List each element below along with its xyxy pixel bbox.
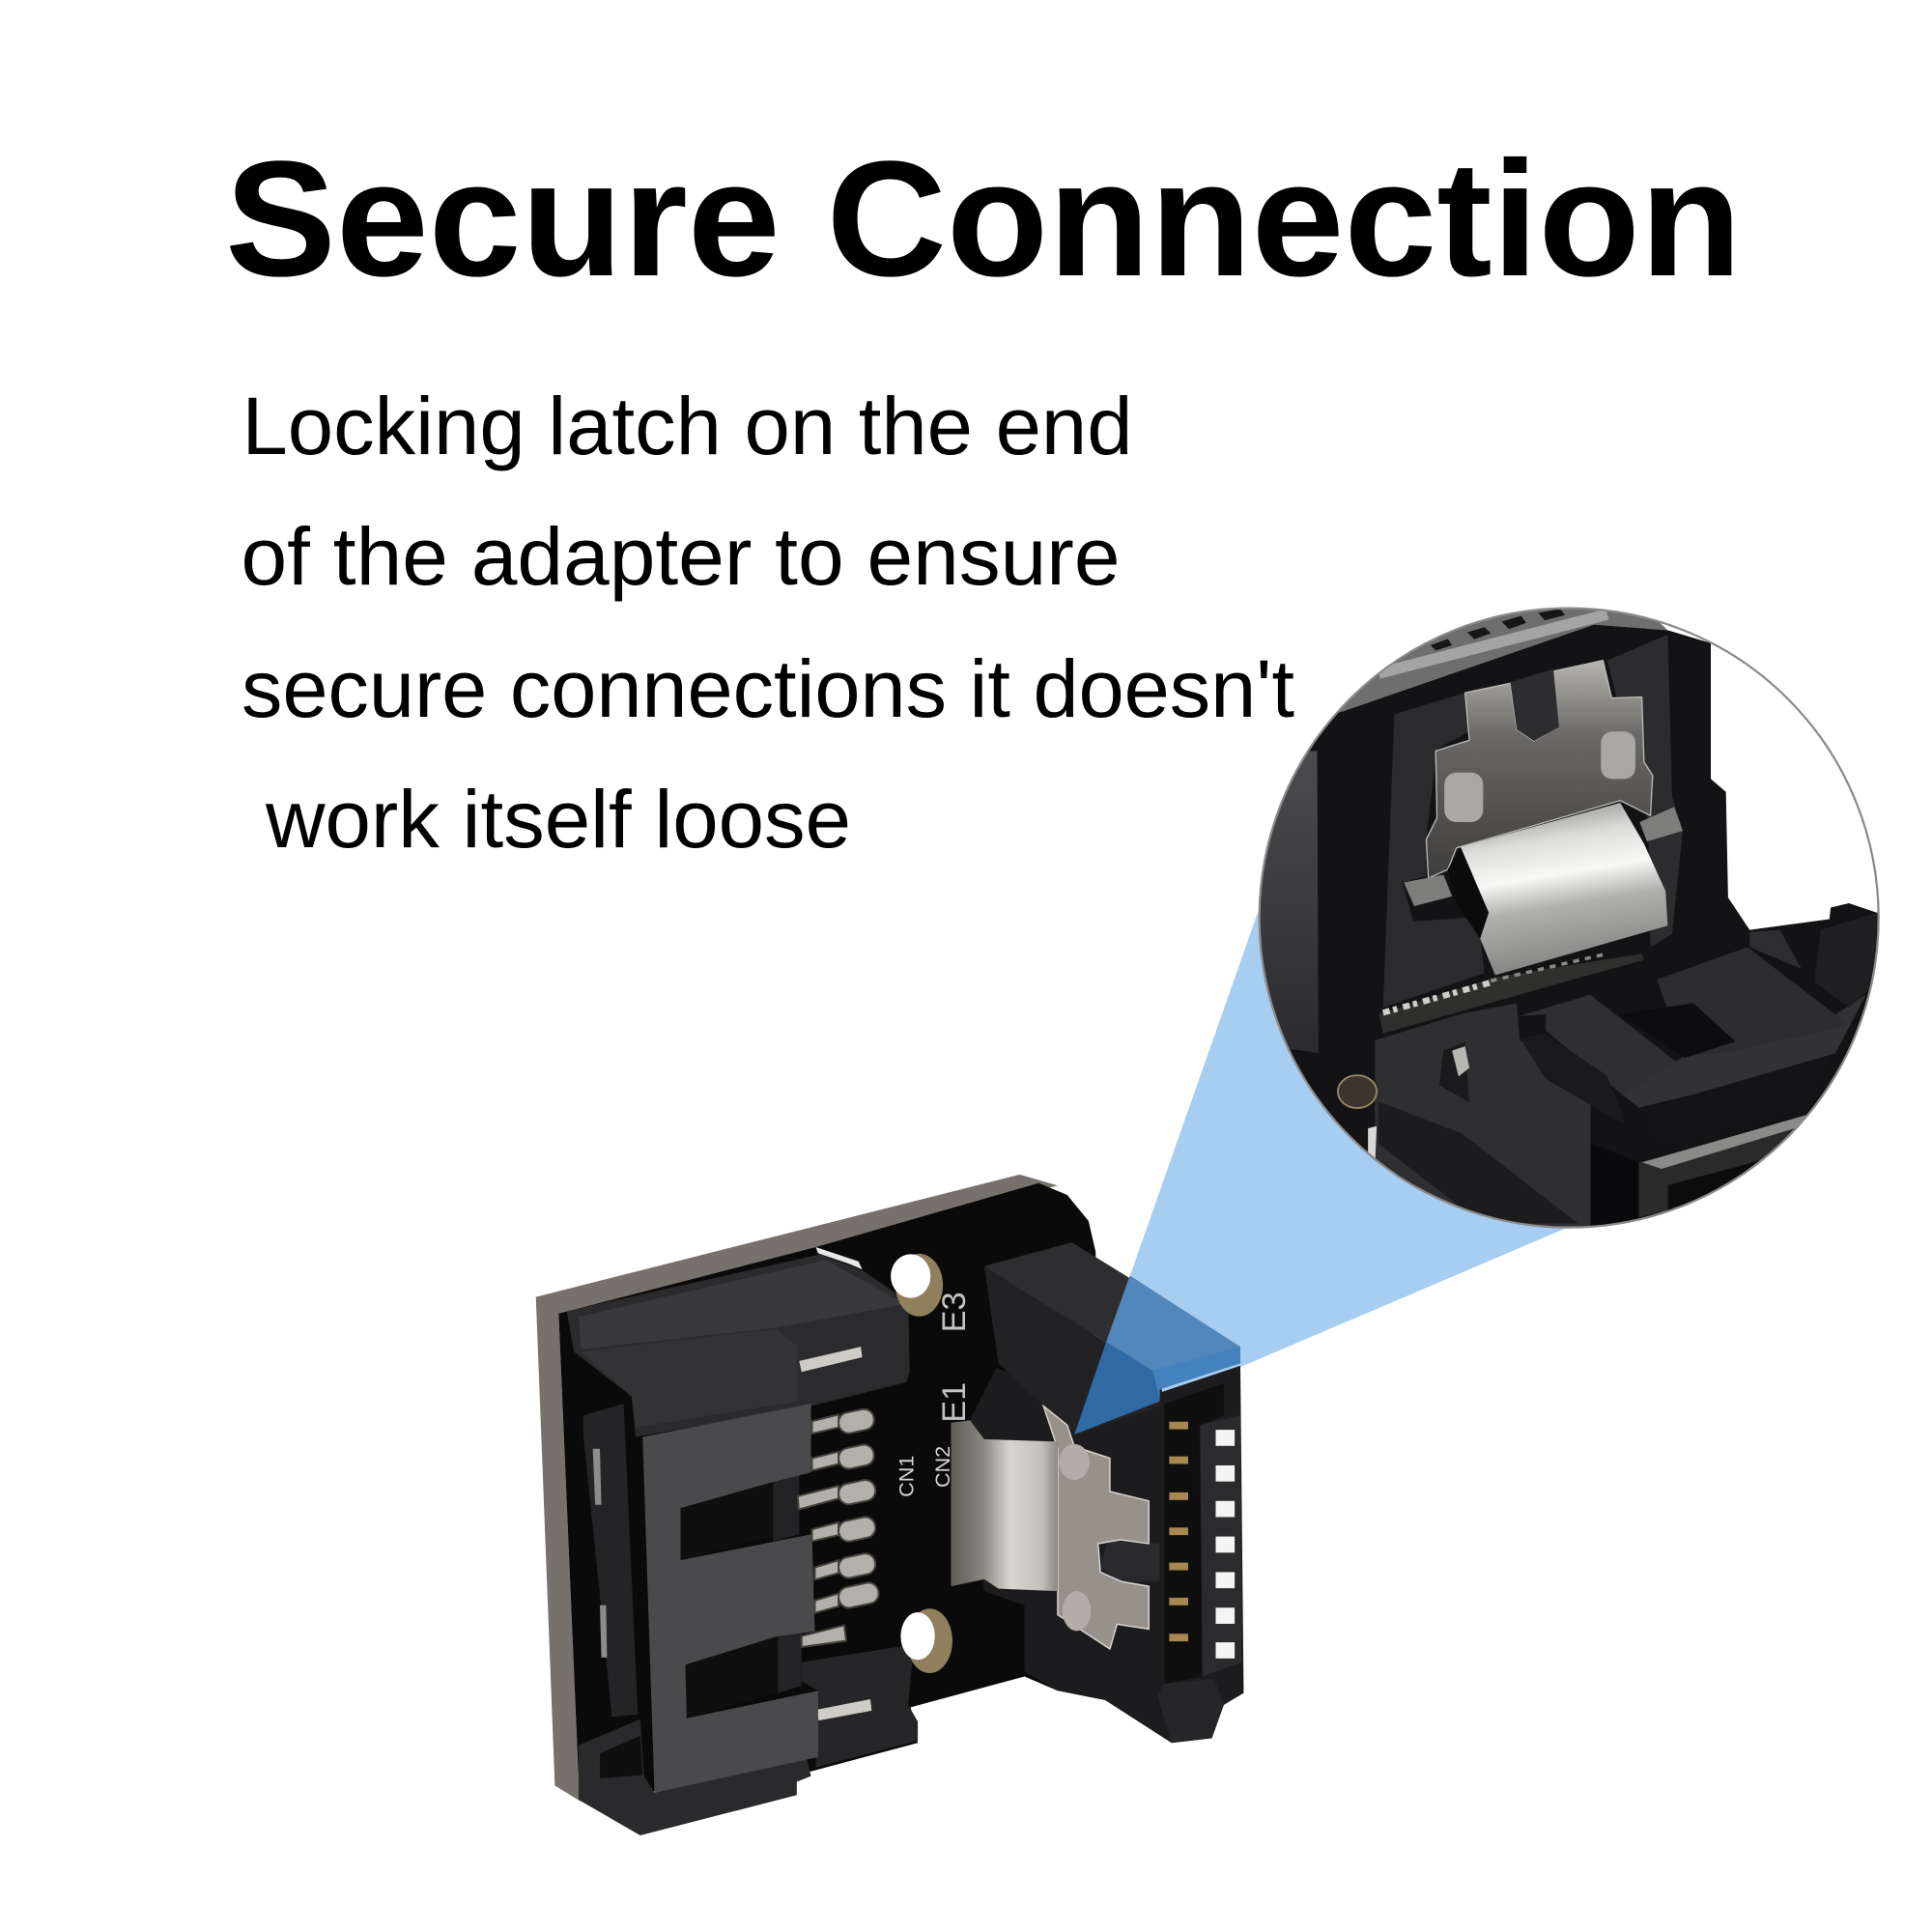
socket pin holder [1200, 1415, 1241, 1676]
blue overlay on rim [1152, 1347, 1240, 1402]
socket opening [1164, 1383, 1224, 1684]
latch rivet bottom [1063, 1591, 1091, 1631]
body text: secure connections it doesn't [242, 643, 1294, 734]
centre housing face [1383, 693, 1485, 1008]
magnifier cone [1074, 904, 1567, 1435]
right connector front face [984, 1266, 1162, 1435]
corner column [1590, 1144, 1638, 1227]
left connector bottom housing [579, 1719, 811, 1835]
top slots [1431, 609, 1565, 650]
silkscreen speckle right [1491, 953, 1607, 980]
slot two [685, 1636, 778, 1719]
socket windows [1215, 1430, 1235, 1659]
dark block behind slots [773, 1470, 802, 1693]
lens clipped photo [1260, 609, 1878, 1227]
zoomed lens circle [1258, 607, 1880, 1229]
black circuit board [558, 1183, 1095, 1801]
right housing face [1607, 635, 1683, 948]
bottom recess [600, 1736, 642, 1778]
shiny latch tab [1461, 803, 1667, 976]
blue overlay on top face [1106, 1275, 1240, 1371]
body text [242, 381, 1294, 865]
board silkscreen labels [895, 1292, 973, 1497]
right corner ledge [1639, 807, 1683, 841]
housing front face [581, 1329, 797, 1428]
socket gold contacts [1169, 1422, 1188, 1641]
board silkscreen labels: CN2 [930, 1446, 954, 1488]
grey top strip area [1339, 609, 1667, 713]
grey backing plate [536, 1175, 1058, 1801]
recessed notch with pin [1439, 1042, 1469, 1102]
body text: work itself loose [265, 774, 851, 865]
bottom right housing [802, 1646, 918, 1768]
left connector side frame [583, 1404, 638, 1717]
dark strap between latch arms [1100, 1542, 1160, 1581]
title: Secure Connection [225, 128, 1742, 311]
board silkscreen labels: CN1 [895, 1456, 919, 1497]
raised centre block top [1519, 995, 1684, 1095]
board silkscreen labels: E3 [936, 1292, 973, 1332]
white board edge [1368, 1126, 1377, 1158]
dark connector mass [1290, 624, 1877, 1219]
lens white base [1260, 609, 1879, 1228]
block shadow [1378, 1101, 1578, 1224]
slot one [681, 1482, 773, 1560]
board silkscreen labels: E1 [936, 1382, 973, 1423]
bottom mounting hole [900, 1608, 952, 1673]
upper metal lead [799, 1347, 863, 1372]
left rivet [1444, 773, 1483, 822]
flat grey front latch shape [642, 1404, 818, 1793]
right raised block [1658, 947, 1835, 1045]
product photo: adapter [536, 1175, 1243, 1835]
right rivet [1601, 731, 1635, 779]
raised block shadow [1522, 1042, 1611, 1105]
dark notch tab [1510, 669, 1559, 741]
dark wedge under tab [1448, 848, 1491, 939]
socket slot [1694, 1053, 1834, 1094]
housing top strip [579, 1260, 906, 1350]
body text: Locking latch on the end [242, 381, 1132, 471]
far right pillar [1814, 912, 1878, 1008]
far right block [1749, 930, 1802, 969]
right connector body [963, 1366, 1243, 1743]
left connector upper housing [567, 1254, 910, 1436]
latch metal plate [1043, 1406, 1149, 1649]
side metal clip top [593, 1449, 602, 1505]
metal latch plate [1426, 661, 1653, 878]
circuit board strip [1378, 953, 1644, 1034]
right connector top face [984, 1242, 1240, 1371]
side metal clip bottom [600, 1605, 607, 1658]
small metal pin [1452, 1046, 1469, 1076]
blue overlay on connector front [1074, 1342, 1160, 1435]
left corner ledge [1404, 875, 1452, 906]
socket interior [1668, 1161, 1758, 1209]
solder pins [798, 1407, 881, 1647]
board hole ring [1338, 1075, 1377, 1108]
socket rim highlight [1642, 1114, 1809, 1169]
front left block [1375, 1004, 1590, 1236]
left wall [1260, 751, 1319, 1053]
white tab behind housing [815, 1247, 863, 1269]
latch curved clip [951, 1420, 1058, 1591]
bright strip edge [1378, 614, 1607, 673]
lower socket ledge [1157, 1679, 1224, 1743]
lens outline [1260, 609, 1879, 1228]
frame below rim [1638, 1125, 1804, 1217]
lower metal lead [816, 1699, 871, 1720]
body text: of the adapter to ensure [242, 511, 1121, 602]
front top band [1623, 995, 1866, 1108]
latch rivet top [1059, 1444, 1090, 1480]
square cut-out [1667, 1003, 1735, 1059]
top mounting hole [891, 1254, 943, 1317]
silkscreen speckle [1383, 982, 1491, 1012]
